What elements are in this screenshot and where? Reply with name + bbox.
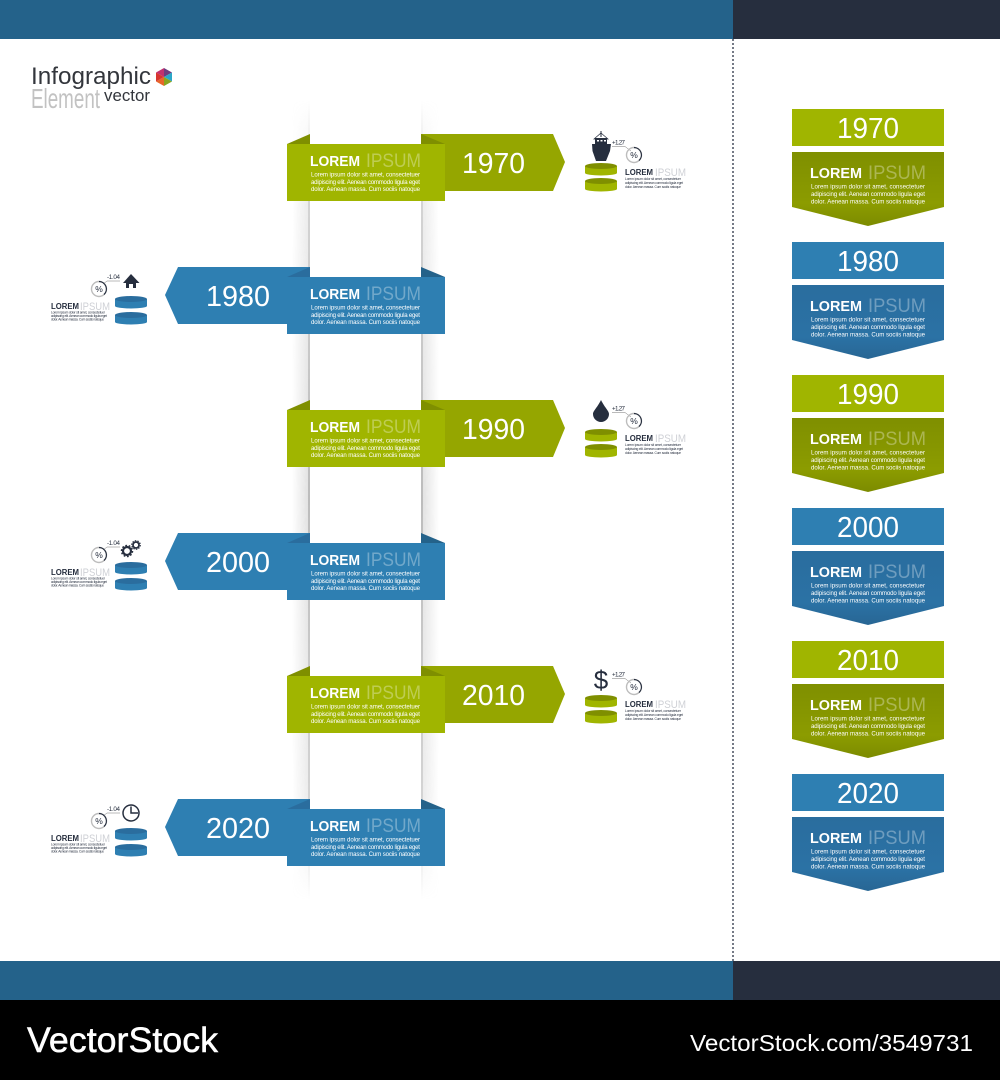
disc bottom bbox=[585, 178, 617, 192]
small text bbox=[51, 310, 107, 322]
disc bottom bbox=[585, 710, 617, 724]
stat block 1990 bbox=[585, 400, 686, 458]
year: 2010 bbox=[837, 645, 899, 677]
value -1.04: -1.04 bbox=[107, 274, 121, 281]
label bbox=[625, 699, 686, 711]
card text: Lorem ipsum dolor sit amet, consectetuer bbox=[811, 716, 925, 722]
timeline column shadows bbox=[296, 120, 434, 880]
panel heading: IPSUM bbox=[366, 151, 421, 172]
label: IPSUM bbox=[80, 567, 110, 579]
small text: adipiscing elit. Aenean commodo ligula eget bbox=[625, 447, 683, 451]
disc top bbox=[585, 163, 617, 176]
fold right bbox=[421, 400, 445, 410]
panel heading bbox=[310, 683, 421, 704]
percent ring: % bbox=[95, 550, 103, 560]
disc bottom bbox=[115, 578, 147, 590]
card body bbox=[792, 684, 944, 758]
year bar bbox=[792, 375, 944, 412]
label: IPSUM bbox=[655, 167, 686, 179]
stat block 2020 bbox=[51, 805, 147, 856]
year bar bbox=[792, 641, 944, 678]
logo: Infographic Element vector: Element bbox=[31, 83, 100, 114]
percent ring: % bbox=[95, 816, 103, 826]
side card 2020 bbox=[792, 774, 944, 891]
disc top bbox=[115, 828, 147, 840]
value +1.27: +1.27 bbox=[612, 406, 626, 412]
timeline row 1980 bbox=[165, 267, 445, 334]
card heading: LOREM bbox=[810, 565, 862, 581]
panel text bbox=[311, 704, 421, 725]
year: 2020 bbox=[837, 778, 899, 810]
arrow: 1980 bbox=[165, 267, 310, 324]
card text: Lorem ipsum dolor sit amet, consectetuer bbox=[811, 184, 925, 190]
small text: adipiscing elit. Aenean commodo ligula eget bbox=[625, 713, 683, 717]
card text: dolor. Aenean massa. Cum sociis natoque bbox=[811, 464, 926, 472]
small text bbox=[51, 842, 107, 854]
panel text: adipiscing elit. Aenean commodo ligula eget bbox=[311, 179, 420, 186]
label: LOREM bbox=[51, 567, 79, 577]
icon: house bbox=[123, 274, 140, 288]
panel text bbox=[311, 304, 421, 326]
year bar bbox=[792, 774, 944, 811]
card body bbox=[792, 817, 944, 891]
small text: adipiscing elit. Aenean commodo ligula eget bbox=[51, 314, 107, 318]
percent ring: % bbox=[630, 682, 638, 692]
panel heading: LOREM bbox=[310, 686, 360, 702]
panel heading: LOREM bbox=[310, 553, 360, 569]
card text: Lorem ipsum dolor sit amet, consectetuer bbox=[811, 848, 925, 856]
icon: ship bbox=[592, 131, 611, 161]
card text bbox=[811, 582, 926, 604]
card text: adipiscing elit. Aenean commodo ligula eget bbox=[811, 457, 925, 464]
card text: dolor. Aenean massa. Cum sociis natoque bbox=[811, 198, 926, 206]
panel text: dolor. Aenean massa. Cum sociis natoque bbox=[311, 186, 421, 193]
panel heading: IPSUM bbox=[366, 417, 421, 438]
panel heading: IPSUM bbox=[366, 550, 421, 571]
small text: dolor. Aenean massa. Cum sociis natoque bbox=[51, 318, 104, 322]
panel text: adipiscing elit. Aenean commodo ligula eget bbox=[311, 578, 420, 585]
card heading bbox=[810, 429, 926, 450]
icon: water drop bbox=[593, 400, 609, 422]
card heading: LOREM bbox=[810, 166, 862, 182]
label: IPSUM bbox=[655, 433, 686, 445]
disc top bbox=[585, 429, 617, 442]
card heading: LOREM bbox=[810, 831, 862, 847]
year: 2000 bbox=[837, 512, 899, 544]
fold right bbox=[421, 267, 445, 277]
arrow: 2000 bbox=[165, 533, 310, 590]
year bar bbox=[792, 508, 944, 545]
card heading: IPSUM bbox=[868, 562, 926, 583]
card text bbox=[811, 184, 926, 206]
percent ring: % bbox=[630, 416, 638, 426]
panel heading: IPSUM bbox=[366, 683, 421, 704]
panel bbox=[287, 144, 445, 201]
percent ring: % bbox=[95, 284, 103, 294]
year: 1980 bbox=[837, 246, 899, 278]
year: 1970 bbox=[837, 113, 899, 145]
watermark bar bbox=[0, 1000, 1000, 1080]
panel text: Lorem ipsum dolor sit amet, consectetuer bbox=[311, 704, 420, 710]
year bar bbox=[792, 109, 944, 146]
card body bbox=[792, 285, 944, 359]
year: 2010 bbox=[462, 680, 525, 712]
panel text: adipiscing elit. Aenean commodo ligula eget bbox=[311, 445, 420, 452]
panel heading: LOREM bbox=[310, 287, 360, 303]
panel text: adipiscing elit. Aenean commodo ligula eget bbox=[311, 711, 420, 718]
label bbox=[625, 433, 686, 445]
disc top bbox=[115, 562, 147, 574]
arrow: 2020 bbox=[165, 799, 310, 856]
year: 2020 bbox=[206, 813, 270, 845]
panel bbox=[287, 676, 445, 733]
card heading bbox=[810, 296, 926, 317]
icon: clock bbox=[123, 805, 139, 821]
panel bbox=[287, 809, 445, 866]
footer band bbox=[0, 961, 1000, 1000]
disc bottom bbox=[115, 844, 147, 856]
label: LOREM bbox=[625, 433, 653, 443]
watermark logo: VectorStock bbox=[27, 1021, 219, 1060]
card text: Lorem ipsum dolor sit amet, consectetuer bbox=[811, 316, 925, 324]
panel heading bbox=[310, 816, 421, 837]
side card 2010 bbox=[792, 641, 944, 758]
panel text: dolor. Aenean massa. Cum sociis natoque bbox=[311, 452, 421, 459]
stat block 1970 bbox=[585, 131, 686, 192]
dotted divider bbox=[732, 39, 734, 961]
panel text bbox=[311, 438, 421, 459]
fold right bbox=[421, 666, 445, 676]
card body bbox=[792, 418, 944, 492]
icon: gears bbox=[121, 541, 140, 557]
disc bottom bbox=[115, 312, 147, 324]
small text: adipiscing elit. Aenean commodo ligula eget bbox=[51, 580, 107, 584]
stat block 1980 bbox=[51, 274, 147, 324]
card text: dolor. Aenean massa. Cum sociis natoque bbox=[811, 598, 926, 604]
value +1.27: +1.27 bbox=[612, 672, 626, 678]
card body bbox=[792, 551, 944, 625]
small text: adipiscing elit. Aenean commodo ligula eget bbox=[625, 181, 683, 185]
side card 1980 bbox=[792, 242, 944, 359]
card heading bbox=[810, 695, 926, 716]
card text: adipiscing elit. Aenean commodo ligula eget bbox=[811, 590, 925, 597]
card text: adipiscing elit. Aenean commodo ligula eget bbox=[811, 856, 925, 863]
panel heading bbox=[310, 550, 421, 571]
card heading: IPSUM bbox=[868, 163, 926, 184]
fold right bbox=[421, 134, 445, 144]
fold left bbox=[287, 666, 310, 676]
icon: colour hexagon bbox=[156, 68, 172, 86]
small text: Lorem ipsum dolor sit amet, consectetuer bbox=[51, 842, 106, 846]
card heading bbox=[810, 163, 926, 184]
card heading: LOREM bbox=[810, 432, 862, 448]
header band bbox=[0, 0, 1000, 39]
timeline row 1990 bbox=[287, 400, 565, 467]
card heading bbox=[810, 828, 926, 849]
side card 1970 bbox=[792, 109, 944, 226]
stat block 2010 bbox=[585, 665, 686, 724]
panel text: dolor. Aenean massa. Cum sociis natoque bbox=[311, 319, 421, 326]
card text bbox=[811, 848, 926, 870]
card body bbox=[792, 152, 944, 226]
card heading: IPSUM bbox=[868, 296, 926, 317]
card text bbox=[811, 450, 926, 472]
panel text: adipiscing elit. Aenean commodo ligula eget bbox=[311, 844, 420, 851]
arrow: 1990 bbox=[421, 400, 565, 457]
panel text: Lorem ipsum dolor sit amet, consectetuer bbox=[311, 172, 420, 178]
small text: adipiscing elit. Aenean commodo ligula eget bbox=[51, 846, 107, 850]
fold left bbox=[287, 533, 310, 543]
card heading: LOREM bbox=[810, 698, 862, 714]
small text: Lorem ipsum dolor sit amet, consectetuer bbox=[625, 709, 682, 713]
card text bbox=[811, 316, 926, 338]
panel heading bbox=[310, 284, 421, 305]
small text: dolor. Aenean massa. Cum sociis natoque bbox=[625, 451, 681, 455]
year: 1990 bbox=[837, 379, 899, 411]
card text: adipiscing elit. Aenean commodo ligula eget bbox=[811, 324, 925, 331]
card text: dolor. Aenean massa. Cum sociis natoque bbox=[811, 730, 926, 738]
fold right bbox=[421, 533, 445, 543]
fold left bbox=[287, 267, 310, 277]
panel text: Lorem ipsum dolor sit amet, consectetuer bbox=[311, 304, 420, 312]
panel text: Lorem ipsum dolor sit amet, consectetuer bbox=[311, 438, 420, 444]
label bbox=[625, 167, 686, 179]
panel text: adipiscing elit. Aenean commodo ligula eget bbox=[311, 312, 420, 319]
panel text bbox=[311, 172, 421, 193]
small text: Lorem ipsum dolor sit amet, consectetuer bbox=[625, 443, 682, 447]
small text: dolor. Aenean massa. Cum sociis natoque bbox=[51, 850, 104, 854]
panel heading bbox=[310, 151, 421, 172]
value +1.27: +1.27 bbox=[612, 140, 626, 146]
panel heading: IPSUM bbox=[366, 284, 421, 305]
panel heading: LOREM bbox=[310, 420, 360, 436]
year bar bbox=[792, 242, 944, 279]
card text: Lorem ipsum dolor sit amet, consectetuer bbox=[811, 582, 925, 590]
disc top bbox=[585, 695, 617, 708]
panel bbox=[287, 543, 445, 600]
label bbox=[51, 301, 110, 313]
panel heading bbox=[310, 417, 421, 438]
card text: Lorem ipsum dolor sit amet, consectetuer bbox=[811, 450, 925, 456]
label bbox=[51, 567, 110, 579]
disc bottom bbox=[585, 444, 617, 458]
icon: dollar: $ bbox=[594, 665, 609, 695]
label: LOREM bbox=[51, 833, 79, 843]
panel bbox=[287, 410, 445, 467]
small text bbox=[625, 443, 683, 455]
small text bbox=[625, 177, 683, 189]
label: IPSUM bbox=[655, 699, 686, 711]
side card 2000 bbox=[792, 508, 944, 625]
logo: Infographic Element vector bbox=[31, 63, 172, 114]
label: LOREM bbox=[51, 301, 79, 311]
side card 1990 bbox=[792, 375, 944, 492]
timeline row 1970 bbox=[287, 134, 565, 201]
fold left bbox=[287, 400, 310, 410]
small text: dolor. Aenean massa. Cum sociis natoque bbox=[625, 717, 681, 721]
arrow: 2010 bbox=[421, 666, 565, 723]
label: LOREM bbox=[625, 699, 653, 709]
card heading: IPSUM bbox=[868, 695, 926, 716]
label: IPSUM bbox=[80, 833, 110, 845]
year: 1970 bbox=[462, 148, 525, 180]
value -1.04: -1.04 bbox=[107, 540, 121, 547]
label bbox=[51, 833, 110, 845]
panel text: dolor. Aenean massa. Cum sociis natoque bbox=[311, 718, 421, 725]
value -1.04: -1.04 bbox=[107, 806, 121, 813]
card text: adipiscing elit. Aenean commodo ligula eget bbox=[811, 191, 925, 198]
card text: dolor. Aenean massa. Cum sociis natoque bbox=[811, 332, 926, 338]
percent ring: % bbox=[630, 150, 638, 160]
panel text: Lorem ipsum dolor sit amet, consectetuer bbox=[311, 570, 420, 578]
logo: Infographic Element vector: vector bbox=[104, 86, 150, 105]
small text: Lorem ipsum dolor sit amet, consectetuer bbox=[625, 177, 682, 181]
panel heading: LOREM bbox=[310, 819, 360, 835]
card text bbox=[811, 716, 926, 738]
panel text bbox=[311, 570, 421, 592]
label: IPSUM bbox=[80, 301, 110, 313]
small text bbox=[51, 576, 107, 588]
timeline row 2020 bbox=[165, 799, 445, 866]
stat block 2000 bbox=[51, 540, 147, 590]
small text: Lorem ipsum dolor sit amet, consectetuer bbox=[51, 576, 106, 580]
panel text: dolor. Aenean massa. Cum sociis natoque bbox=[311, 585, 421, 592]
disc top bbox=[115, 296, 147, 308]
arrow: 1970 bbox=[421, 134, 565, 191]
panel text: Lorem ipsum dolor sit amet, consectetuer bbox=[311, 836, 420, 844]
panel bbox=[287, 277, 445, 334]
small text: dolor. Aenean massa. Cum sociis natoque bbox=[625, 185, 681, 189]
label: LOREM bbox=[625, 167, 653, 177]
small text: Lorem ipsum dolor sit amet, consectetuer bbox=[51, 310, 106, 314]
fold left bbox=[287, 799, 310, 809]
small text bbox=[625, 709, 683, 721]
fold left bbox=[287, 134, 310, 144]
card heading: IPSUM bbox=[868, 429, 926, 450]
watermark url: VectorStock.com/3549731 bbox=[690, 1030, 973, 1056]
panel text bbox=[311, 836, 421, 858]
panel heading: IPSUM bbox=[366, 816, 421, 837]
logo: Infographic Element vector: Infographic bbox=[31, 63, 151, 90]
timeline row 2010 bbox=[287, 666, 565, 733]
timeline row 2000 bbox=[165, 533, 445, 600]
year: 1980 bbox=[206, 281, 270, 313]
card heading bbox=[810, 562, 926, 583]
year: 1990 bbox=[462, 414, 525, 446]
panel heading: LOREM bbox=[310, 154, 360, 170]
card heading: IPSUM bbox=[868, 828, 926, 849]
card text: adipiscing elit. Aenean commodo ligula eget bbox=[811, 723, 925, 730]
fold right bbox=[421, 799, 445, 809]
year: 2000 bbox=[206, 547, 270, 579]
small text: dolor. Aenean massa. Cum sociis natoque bbox=[51, 584, 104, 588]
card text: dolor. Aenean massa. Cum sociis natoque bbox=[811, 864, 926, 870]
card heading: LOREM bbox=[810, 299, 862, 315]
panel text: dolor. Aenean massa. Cum sociis natoque bbox=[311, 851, 421, 858]
